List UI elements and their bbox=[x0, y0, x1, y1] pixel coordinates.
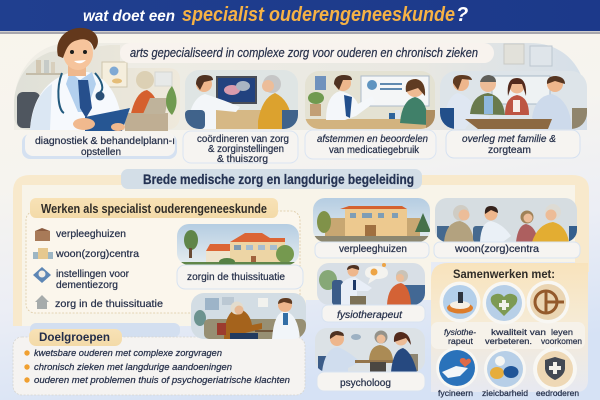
caption: coördineren bbox=[183, 131, 298, 165]
list: target groups: kwetsbare ouderen met complexe zorgvragen bbox=[34, 348, 222, 358]
caption: diagnostiek: opstellen bbox=[81, 147, 121, 158]
icon: shield cross bbox=[533, 347, 577, 391]
panel: wide care tan frame bbox=[13, 175, 589, 326]
illustration: care coordination at computer bbox=[185, 70, 298, 129]
pill: subtitle bbox=[120, 43, 494, 63]
labels: first row: leyen bbox=[551, 327, 573, 337]
caption: woon(zorg)centra bbox=[434, 242, 580, 258]
panel: doelgroepen bbox=[13, 329, 305, 395]
illustration: nursing home bbox=[313, 198, 431, 242]
labels: first row: kwaliteit van bbox=[491, 327, 546, 337]
caption: coördineren: & zorginstellingen bbox=[208, 144, 284, 155]
labels: first row: rapeut bbox=[448, 336, 474, 346]
list item: thuissituatie: zorg in de thuissituatie bbox=[55, 298, 163, 310]
panel: samenwerken met: Samenwerken met: bbox=[453, 269, 555, 281]
title: specialist ouderengeneeskunde bbox=[182, 4, 455, 26]
caption: coördineren: & thuiszorg bbox=[217, 154, 268, 165]
caption: psycholoog: psycholoog bbox=[340, 378, 391, 389]
illustration: psychologist bbox=[315, 328, 425, 372]
caption: coördineren: coördineren van zorg bbox=[197, 134, 289, 145]
list: target groups: ouderen met problemen thuis of psychogeriatrische klachten bbox=[34, 375, 290, 385]
illustration: home building bbox=[177, 224, 299, 266]
pill: subtitle: arts gepecialiseerd in complexe zorg voor ouderen en chronisch zieken bbox=[130, 46, 478, 60]
illustration: doctor with patient in consulting room bbox=[14, 28, 180, 131]
list item: thuissituatie bbox=[35, 295, 163, 310]
list item: woon(zorg)centra: woon(zorg)centra bbox=[55, 248, 139, 260]
caption: overleg: overleg met familie & bbox=[462, 134, 556, 145]
labels: first row: voorkomen bbox=[541, 336, 582, 346]
list item: instellingen: instellingen voor bbox=[56, 268, 129, 280]
illustration: physiotherapist bbox=[317, 263, 425, 305]
icon: caring hand bbox=[436, 347, 478, 389]
panel: doelgroepen: Doelgroepen bbox=[39, 332, 110, 344]
illustration: residents with carer bbox=[435, 198, 577, 242]
icon: physiotherapy bbox=[440, 282, 480, 322]
caption: overleg bbox=[446, 130, 580, 158]
labels: first row: fysiothe- bbox=[444, 327, 476, 337]
caption: medicatie: afstemmen en beoordelen bbox=[317, 134, 428, 145]
caption: fysiotherapeut bbox=[322, 305, 425, 322]
caption: overleg: zorgteam bbox=[488, 145, 531, 156]
icon: visibility figures bbox=[484, 348, 526, 390]
list item: verpleeghuizen: verpleeghuizen bbox=[56, 228, 126, 240]
heading: wide care bbox=[121, 169, 422, 189]
icon: prevention wheel bbox=[526, 280, 570, 324]
list item: instellingen: dementiezorg bbox=[56, 279, 118, 291]
labels: first row bbox=[444, 327, 582, 346]
illustration: top right wall frames bbox=[504, 44, 552, 66]
caption: medicatie: van medicatiegebruik bbox=[329, 145, 420, 156]
caption: medicatie bbox=[305, 130, 436, 159]
illustration: medication review bbox=[305, 71, 435, 129]
panel: samenwerken met bbox=[431, 263, 588, 398]
illustration: home visit bbox=[191, 293, 306, 339]
list: target groups bbox=[24, 348, 290, 385]
caption: fysiotherapeut: fysiotherapeut bbox=[337, 310, 403, 321]
band: blue strip above target groups bbox=[30, 323, 180, 337]
panel: wide care interior bbox=[22, 185, 575, 326]
list item: instellingen bbox=[33, 267, 129, 291]
labels: second row: eedroderen bbox=[536, 388, 579, 398]
caption: diagnostiek: diagnostiek & behandelplann-ı bbox=[35, 136, 175, 147]
labels: second row: fycineern bbox=[438, 388, 473, 398]
labels: first row: verbeteren. bbox=[485, 336, 532, 346]
panel: werken als: Werken als specialist ouderengeneeskunde bbox=[41, 201, 267, 216]
heading: wide care: Brede medische zorg en langdurige begeleiding bbox=[143, 172, 414, 187]
list: target groups: chronisch zieken met langdurige aandoeningen bbox=[34, 362, 232, 372]
panel: tasks backdrop bbox=[14, 43, 587, 130]
caption: woon(zorg)centra: woon(zorg)centra bbox=[454, 244, 540, 255]
labels: second row: zieicbarheid bbox=[482, 388, 528, 398]
panel: werken als bbox=[26, 198, 300, 313]
labels: second row bbox=[438, 388, 579, 398]
title: wat doet een bbox=[83, 8, 175, 25]
icon: heart quality bbox=[482, 282, 526, 324]
caption: zorg in de thuissituatie: zorgin de thuissituatie bbox=[187, 271, 285, 283]
title: ? bbox=[456, 4, 468, 26]
caption: verpleeghuizen: verpleeghuizen bbox=[339, 244, 407, 255]
illustration: family and care team meeting bbox=[440, 71, 587, 129]
header band bbox=[0, 0, 600, 34]
caption: psycholoog bbox=[317, 372, 425, 391]
caption: zorg in de thuissituatie bbox=[177, 265, 303, 289]
caption: diagnostiek bbox=[22, 132, 177, 159]
caption: verpleeghuizen bbox=[315, 242, 429, 258]
